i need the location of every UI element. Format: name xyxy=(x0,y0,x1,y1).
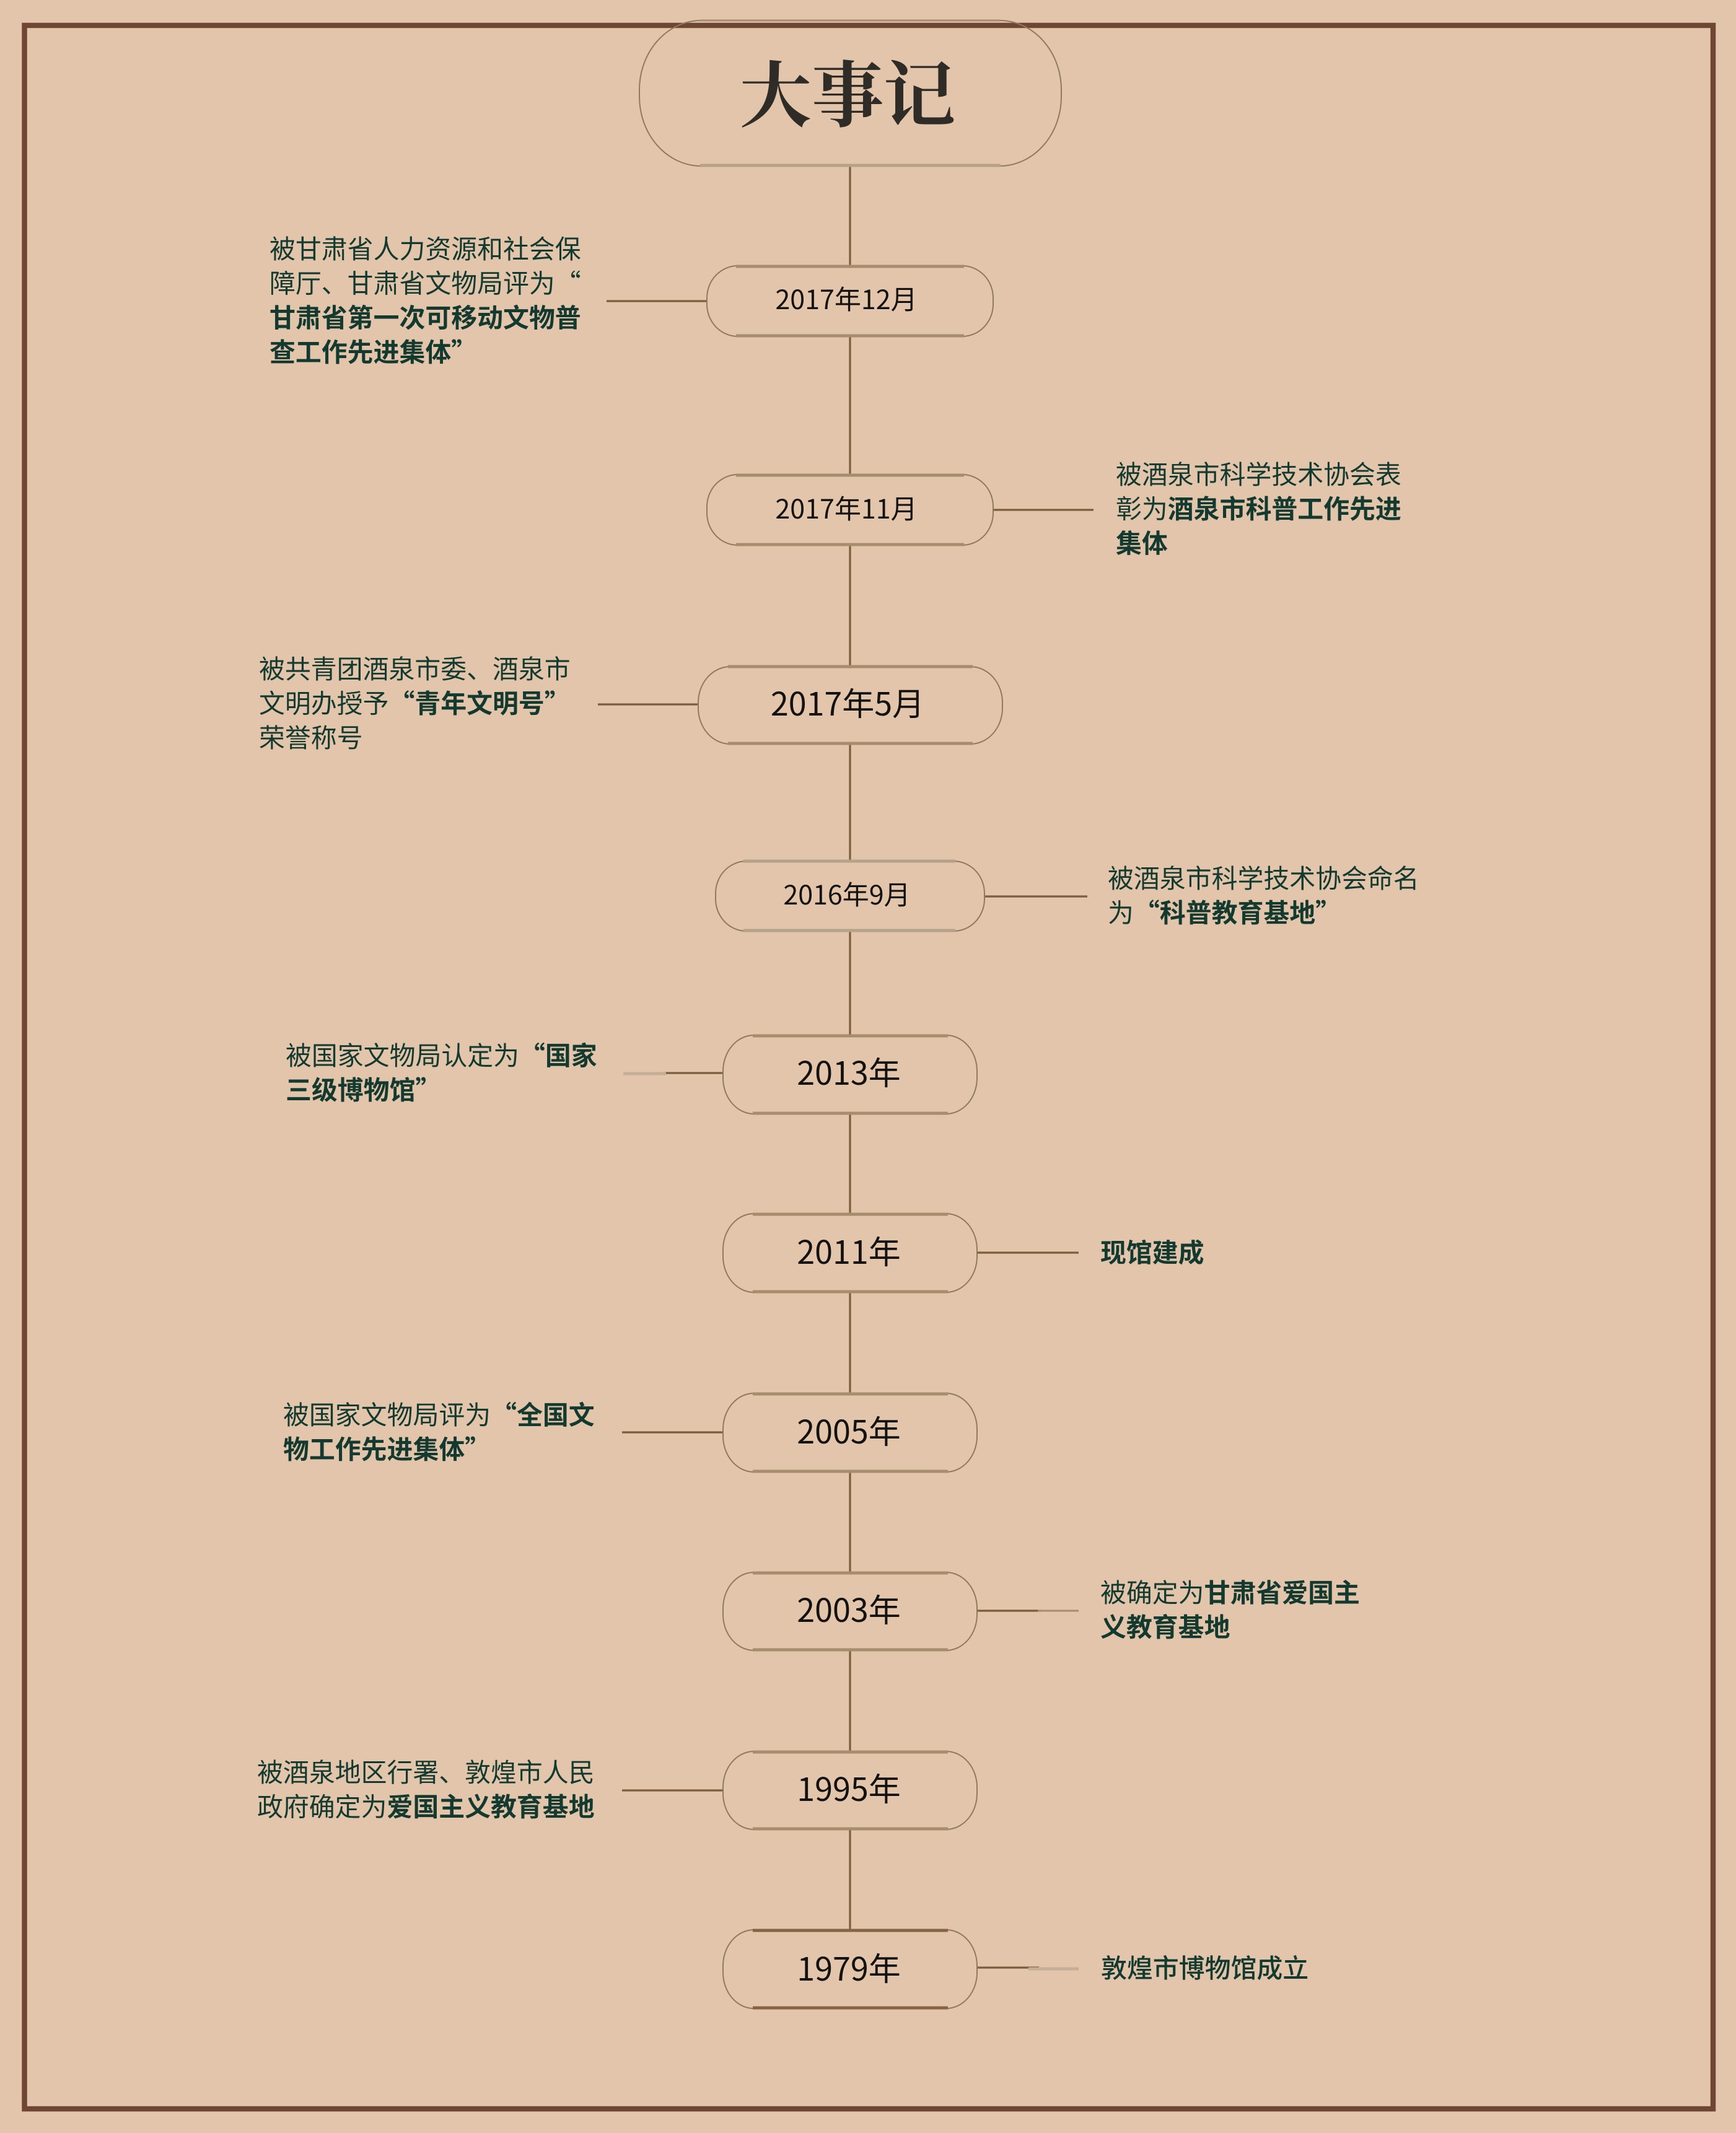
milestone 2016年9月 xyxy=(716,858,1419,931)
description 2005年: 物工作先进集体” xyxy=(283,1429,491,1467)
title text: 大事记 xyxy=(740,38,955,142)
description 2017年5月: 文明办授予 xyxy=(259,683,388,721)
description 2016年9月: 被酒泉市科学技术协会命名 xyxy=(1108,858,1419,896)
milestone 1979年: 1979年 xyxy=(797,1943,901,1990)
milestone 1995年 xyxy=(257,1751,977,1829)
milestone 2017年11月 xyxy=(707,454,1401,561)
milestone 2017年12月 xyxy=(270,229,993,369)
description 2017年11月: 酒泉市科普工作先进 xyxy=(1168,488,1401,527)
description 2017年11月: 彰为 xyxy=(1116,488,1168,527)
milestone 2013年: 2013年 xyxy=(797,1048,901,1094)
description 2016年9月: “科普教育基地” xyxy=(1134,892,1341,931)
description 2013年: 被国家文物局认定为“国家 xyxy=(286,1035,597,1073)
description 1979年: 敦煌市博物馆成立 xyxy=(1101,1948,1309,1986)
description 2017年5月: 被共青团酒泉市委、酒泉市 xyxy=(259,649,571,686)
milestone 2003年: 2003年 xyxy=(797,1585,901,1631)
description 1995年: 被酒泉地区行署、敦煌市人民 xyxy=(257,1752,595,1790)
description 2016年9月: 为 xyxy=(1108,892,1134,931)
central timeline vertical line xyxy=(849,166,851,1930)
description 2017年12月: 被甘肃省人力资源和社会保 xyxy=(270,229,581,266)
description 2017年11月: 被酒泉市科学技术协会表 xyxy=(1116,454,1401,492)
milestone 2016年9月: 2016年9月 xyxy=(783,874,911,913)
description 2005年: 被国家文物局评为“全国文 xyxy=(283,1395,595,1432)
description 1995年: 政府确定为 xyxy=(257,1787,387,1824)
milestone 1995年: 1995年 xyxy=(797,1764,901,1810)
description 2011年: 现馆建成 xyxy=(1100,1232,1204,1270)
milestone 1979年 xyxy=(723,1930,1309,2008)
milestone 2017年12月: 2017年12月 xyxy=(775,279,918,317)
description 2017年12月: 查工作先进集体” xyxy=(270,332,477,369)
milestone 2017年5月: 2017年5月 xyxy=(771,678,924,725)
description 2017年11月: 集体 xyxy=(1116,523,1168,561)
description 2017年5月: 荣誉称号 xyxy=(259,717,363,755)
description 2017年5月: “青年文明号” xyxy=(388,683,571,721)
milestone 2005年 xyxy=(283,1393,977,1472)
description 2013年: 三级博物馆” xyxy=(286,1069,441,1108)
description 1995年: 爱国主义教育基地 xyxy=(387,1787,595,1824)
milestone 2013年 xyxy=(286,1035,977,1114)
title pill xyxy=(639,20,1061,166)
milestone 2003年 xyxy=(723,1572,1360,1650)
milestone 2005年: 2005年 xyxy=(797,1406,901,1453)
milestone 2011年 xyxy=(723,1214,1204,1292)
milestone 2017年5月 xyxy=(259,649,1002,755)
description 2003年: 被确定为甘肃省爱国主 xyxy=(1100,1572,1360,1610)
description 2017年12月: 障厅、甘肃省文物局评为“ xyxy=(270,263,581,301)
milestone 2011年: 2011年 xyxy=(797,1227,901,1273)
milestone 2017年11月: 2017年11月 xyxy=(775,488,918,527)
description 2003年: 义教育基地 xyxy=(1100,1607,1230,1644)
description 2017年12月: 甘肃省第一次可移动文物普 xyxy=(270,297,581,335)
